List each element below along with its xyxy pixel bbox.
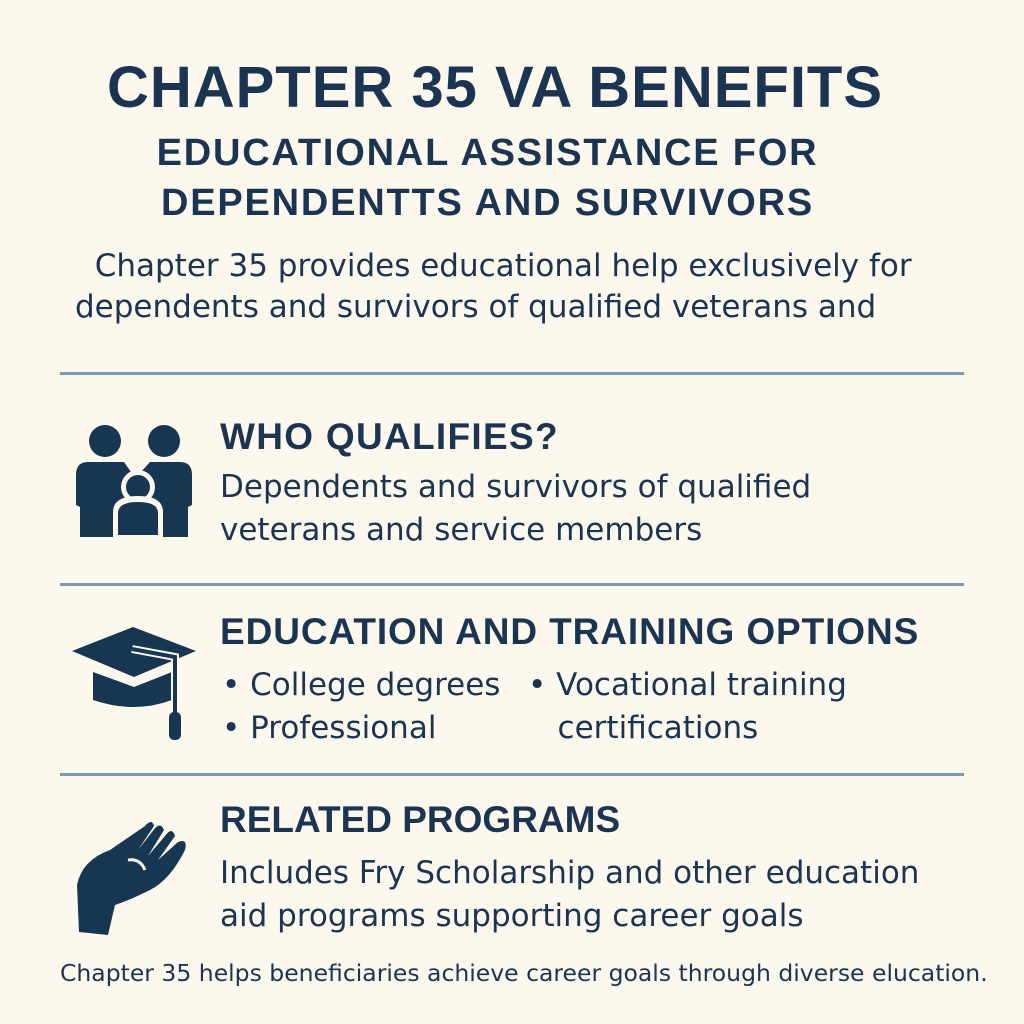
section: related programs xyxy=(77,799,919,935)
body: Includes Fry Scholarship and other education xyxy=(220,855,919,891)
bullets: • Professional xyxy=(222,710,436,746)
body: Dependents and survivors of qualified xyxy=(220,469,811,505)
section: education options xyxy=(72,611,919,746)
footer: Chapter 35 helps beneficiaries achieve career goals through diverse elucation. xyxy=(60,959,988,987)
body xyxy=(220,469,811,548)
heading: EDUCATION AND TRAINING OPTIONS xyxy=(220,611,919,652)
heading: WHO QUALIFIES? xyxy=(220,416,559,457)
title: CHAPTER 35 VA BENEFITS xyxy=(107,55,883,120)
body xyxy=(220,855,919,934)
intro text xyxy=(75,248,912,325)
subtitle: EDUCATIONAL ASSISTANCE FOR xyxy=(157,132,818,174)
section: education options: • Vocational training xyxy=(528,667,847,703)
icon: graduation cap xyxy=(72,627,196,740)
section: education options: certifications xyxy=(558,710,758,746)
bullets: • College degrees xyxy=(222,667,500,703)
icon: hand xyxy=(77,822,186,935)
subtitle xyxy=(157,132,818,224)
intro text: Chapter 35 provides educational help exclusively for xyxy=(95,248,912,284)
icon: family xyxy=(76,425,192,537)
body: veterans and service members xyxy=(220,512,702,548)
section: who qualifies xyxy=(76,416,811,548)
heading: RELATED PROGRAMS xyxy=(220,799,620,840)
bullets xyxy=(222,667,500,746)
body: aid programs supporting career goals xyxy=(220,898,804,934)
subtitle: DEPENDENTTS AND SURVIVORS xyxy=(161,182,814,224)
intro text: dependents and survivors of qualified veterans and xyxy=(75,289,876,325)
